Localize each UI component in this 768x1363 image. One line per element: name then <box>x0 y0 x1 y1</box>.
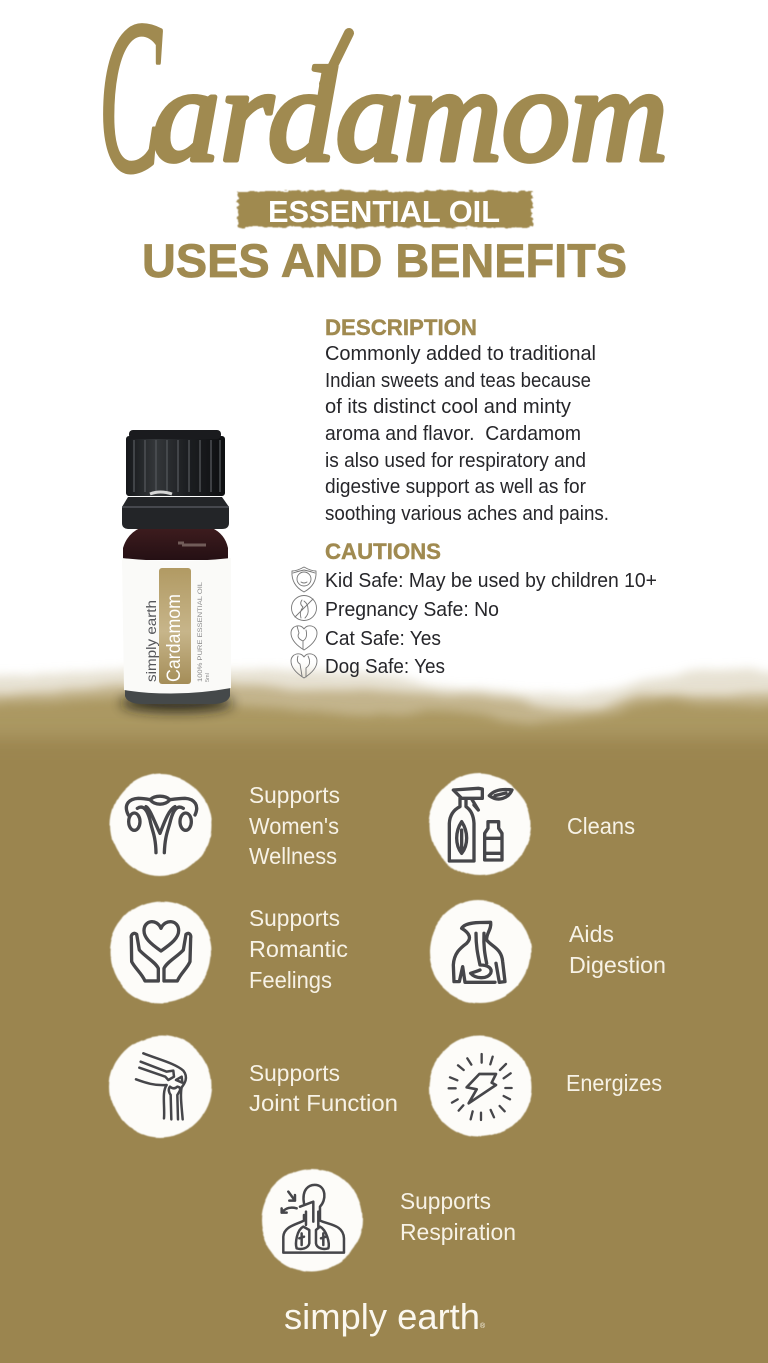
label: Women's <box>249 813 339 839</box>
description text: aroma and flavor. Cardamom <box>325 422 581 445</box>
cap lip <box>129 430 221 439</box>
benefit: aids digestion <box>429 901 666 1003</box>
description text <box>325 342 609 525</box>
label descriptor: 100% PURE ESSENTIAL OIL <box>197 582 204 682</box>
description text: is also used for respiratory and <box>325 449 586 472</box>
label <box>249 905 348 993</box>
label: Aids <box>569 921 614 947</box>
cautions heading: CAUTIONS <box>325 539 441 564</box>
panel: description <box>325 315 609 525</box>
cap ribs <box>134 440 220 492</box>
description text: Commonly added to traditional <box>325 342 596 365</box>
cap collar <box>122 497 229 529</box>
label: Joint Function <box>249 1090 398 1116</box>
icon: hands holding heart <box>131 922 191 981</box>
logo: simply earth: simply earth <box>284 1296 480 1337</box>
benefit: supports women's wellness <box>110 774 340 876</box>
description text: digestive support as well as for <box>325 475 586 498</box>
icon: spray bottle, leaf and dropper bottle <box>449 788 512 861</box>
caution: kid safe: Kid Safe: May be used by children 10+ <box>325 569 657 592</box>
icon: torso with stomach <box>453 922 505 982</box>
label <box>400 1188 516 1245</box>
description text: soothing various aches and pains. <box>325 502 609 525</box>
label: Supports <box>249 905 340 931</box>
panel: cautions <box>291 539 657 678</box>
benefit: cleans <box>429 774 635 876</box>
label <box>249 782 340 869</box>
label: Supports <box>400 1188 491 1214</box>
label: Romantic <box>249 936 348 962</box>
benefit: energizes <box>429 1036 662 1138</box>
caution: dog safe: Dog Safe: Yes <box>325 655 445 678</box>
label: Cleans <box>567 813 635 839</box>
glass highlights <box>178 543 206 545</box>
benefit: supports respiration <box>261 1169 516 1271</box>
description text: of its distinct cool and minty <box>325 395 572 418</box>
icon: lightning bolt with rays <box>449 1054 512 1120</box>
white highlight under cap <box>150 492 172 494</box>
heading: uses and benefits: USES AND BENEFITS <box>142 234 627 287</box>
description heading: DESCRIPTION <box>325 315 477 340</box>
label name: Cardamom <box>164 594 185 682</box>
gold label panel <box>159 568 191 684</box>
amber glass <box>123 528 228 560</box>
label brand: simply earth <box>144 600 159 682</box>
subtitle: essential oil brush banner: ESSENTIAL OIL <box>268 194 500 229</box>
caution: cat safe: Cat Safe: Yes <box>325 627 441 650</box>
watercolor gold lower background <box>0 668 768 1363</box>
icon: knee joint <box>136 1053 186 1119</box>
label: Digestion <box>569 952 666 978</box>
bottle shadow <box>121 694 233 712</box>
benefit: supports joint function <box>110 1036 398 1138</box>
bottle base <box>125 688 230 704</box>
title: Cardamom <box>99 0 668 218</box>
label: Supports <box>249 1060 340 1086</box>
white label <box>122 558 231 694</box>
label: Respiration <box>400 1219 516 1245</box>
label <box>249 1060 398 1116</box>
label: Feelings <box>249 967 332 993</box>
title: Cardamom: ardamom <box>152 41 668 190</box>
icon: respiratory system <box>282 1185 344 1253</box>
logo: simply earth: ® <box>480 1322 486 1330</box>
cap ribbed top <box>126 436 225 496</box>
product bottle <box>121 430 233 712</box>
label volume: 5ml <box>205 673 211 682</box>
caution: pregnancy safe: Pregnancy Safe: No <box>325 598 499 621</box>
label: Wellness <box>249 843 337 869</box>
icon: uterus <box>126 796 197 853</box>
benefit: supports romantic feelings <box>110 901 348 1003</box>
label <box>569 921 666 978</box>
description text: Indian sweets and teas because <box>325 369 591 392</box>
label: Supports <box>249 782 340 808</box>
collar line <box>122 506 229 508</box>
caution: cat safe <box>291 626 441 650</box>
caution: dog safe <box>291 654 445 678</box>
label: Energizes <box>566 1070 662 1096</box>
